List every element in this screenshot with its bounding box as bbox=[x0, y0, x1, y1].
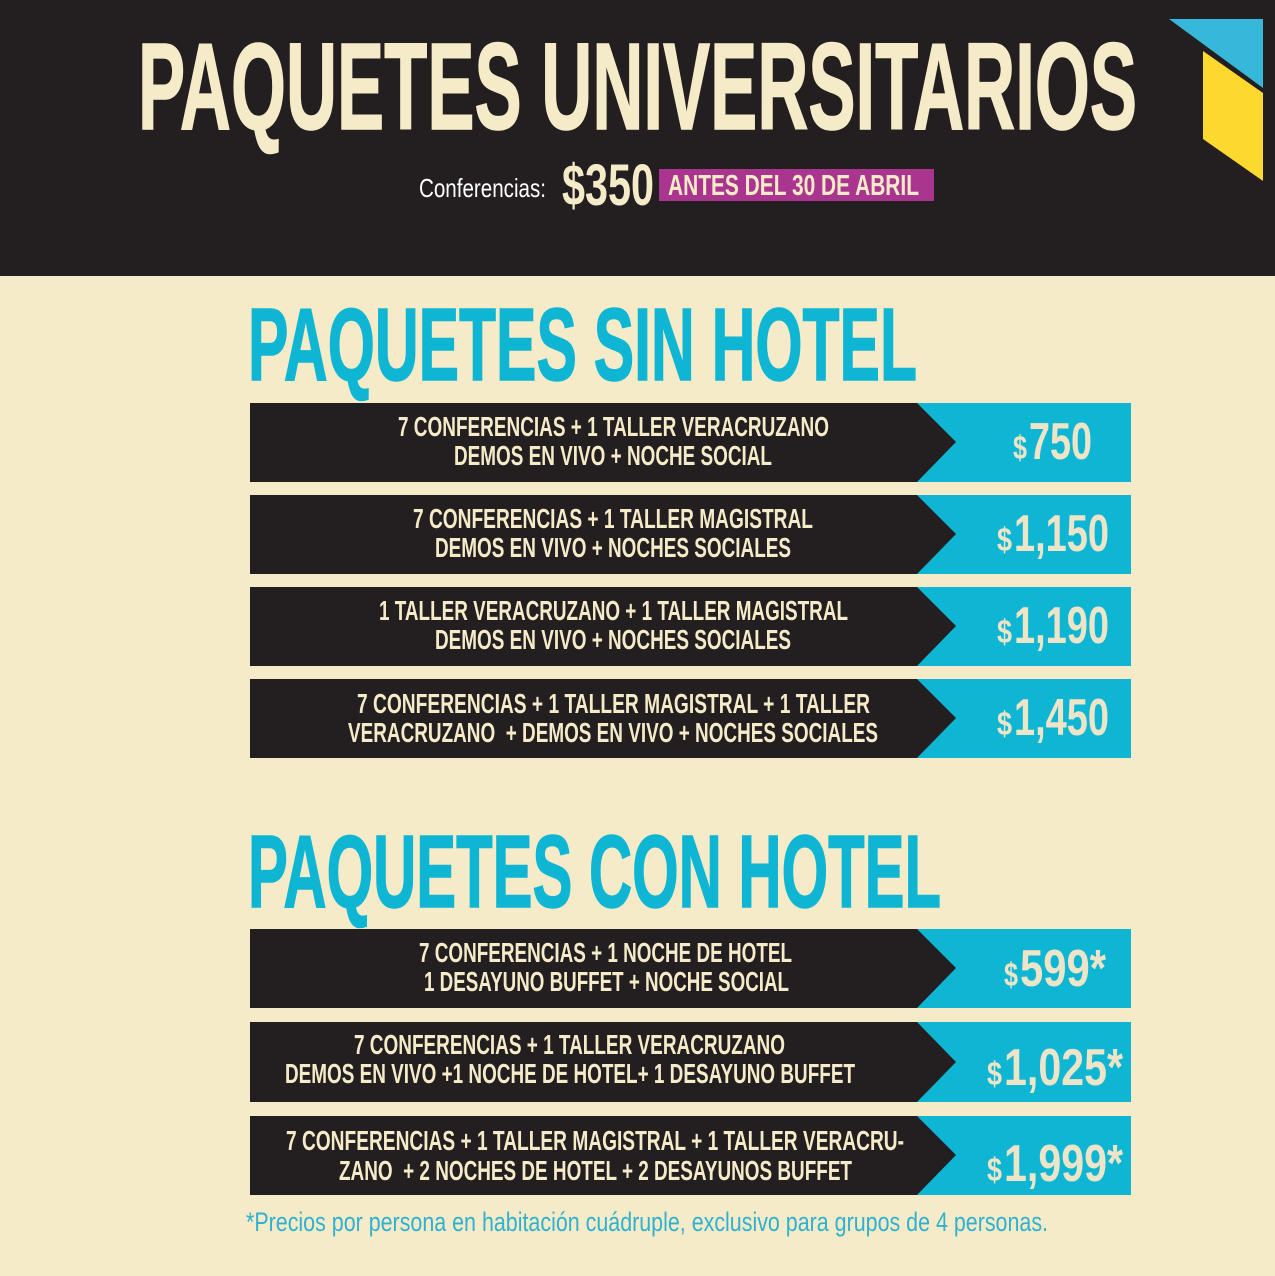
package row: 1,150: DEMOS EN VIVO + NOCHES SOCIALES bbox=[435, 532, 791, 563]
package row: 599 bbox=[250, 929, 1131, 1008]
header band bbox=[0, 0, 1275, 276]
package row: 750: $ bbox=[1013, 429, 1027, 466]
package row: 1,150 bbox=[250, 495, 1131, 574]
package row: 1,025: $ bbox=[987, 1055, 1002, 1092]
package row: 1,450: VERACRUZANO + DEMOS EN VIVO + NOCHES SOCIALES bbox=[348, 717, 878, 748]
package row: 1,450 bbox=[250, 679, 1131, 758]
package row: 599: 1 DESAYUNO BUFFET + NOCHE SOCIAL bbox=[424, 966, 789, 997]
package row: 1,025: DEMOS EN VIVO +1 NOCHE DE HOTEL+ 1 DESAYUNO BUFFET bbox=[285, 1058, 855, 1089]
package row: 750: DEMOS EN VIVO + NOCHE SOCIAL bbox=[454, 440, 772, 471]
package row: 1,999: 1,999* bbox=[1004, 1135, 1124, 1193]
package row: 1,999: ZANO + 2 NOCHES DE HOTEL + 2 DESAYUNOS BUFFET bbox=[339, 1155, 852, 1186]
package row: 599: 7 CONFERENCIAS + 1 NOCHE DE HOTEL bbox=[419, 937, 792, 968]
package row: 599: $ bbox=[1004, 956, 1018, 993]
package row: 1,450: $ bbox=[997, 705, 1012, 742]
conferencias price: $350 bbox=[562, 153, 654, 218]
package row: 1,025: 7 CONFERENCIAS + 1 TALLER VERACRUZANO bbox=[354, 1029, 785, 1060]
package row: 1,190: $ bbox=[997, 613, 1012, 650]
package row: 750 bbox=[250, 403, 1131, 482]
conferencias label: Conferencias: bbox=[419, 173, 546, 203]
package row: 1,190: DEMOS EN VIVO + NOCHES SOCIALES bbox=[435, 624, 791, 655]
package row: 1,150: 1,150 bbox=[1014, 505, 1109, 563]
package row: 750: 7 CONFERENCIAS + 1 TALLER VERACRUZANO bbox=[398, 411, 829, 442]
package row: 1,025 bbox=[250, 1022, 1131, 1102]
package row: 1,450: 7 CONFERENCIAS + 1 TALLER MAGISTRAL + 1 TALLER bbox=[357, 688, 870, 719]
package row: 1,190 bbox=[250, 587, 1131, 666]
package row: 1,025: 1,025* bbox=[1004, 1039, 1124, 1097]
package row: 599: 599* bbox=[1020, 940, 1107, 998]
footnote: *Precios por persona en habitación cuádruple, exclusivo para grupos de 4 personas. bbox=[246, 1207, 1048, 1237]
package row: 1,150: $ bbox=[997, 521, 1012, 558]
package row: 1,190: 1,190 bbox=[1014, 597, 1109, 655]
package row: 1,190: 1 TALLER VERACRUZANO + 1 TALLER MAGISTRAL bbox=[379, 595, 848, 626]
package row: 1,999 bbox=[250, 1116, 1131, 1195]
deadline badge: ANTES DEL 30 DE ABRIL bbox=[668, 170, 919, 202]
package row: 1,450: 1,450 bbox=[1014, 689, 1109, 747]
package row: 1,150: 7 CONFERENCIAS + 1 TALLER MAGISTRAL bbox=[413, 503, 813, 534]
icon: yellow parallelogram bbox=[1203, 51, 1263, 181]
package row: 1,999: 7 CONFERENCIAS + 1 TALLER MAGISTRAL + 1 TALLER VERACRU- bbox=[286, 1125, 904, 1156]
package row: 1,999: $ bbox=[987, 1151, 1002, 1188]
icon: blue triangle bbox=[1169, 19, 1263, 88]
package row: 750: 750 bbox=[1029, 413, 1092, 471]
